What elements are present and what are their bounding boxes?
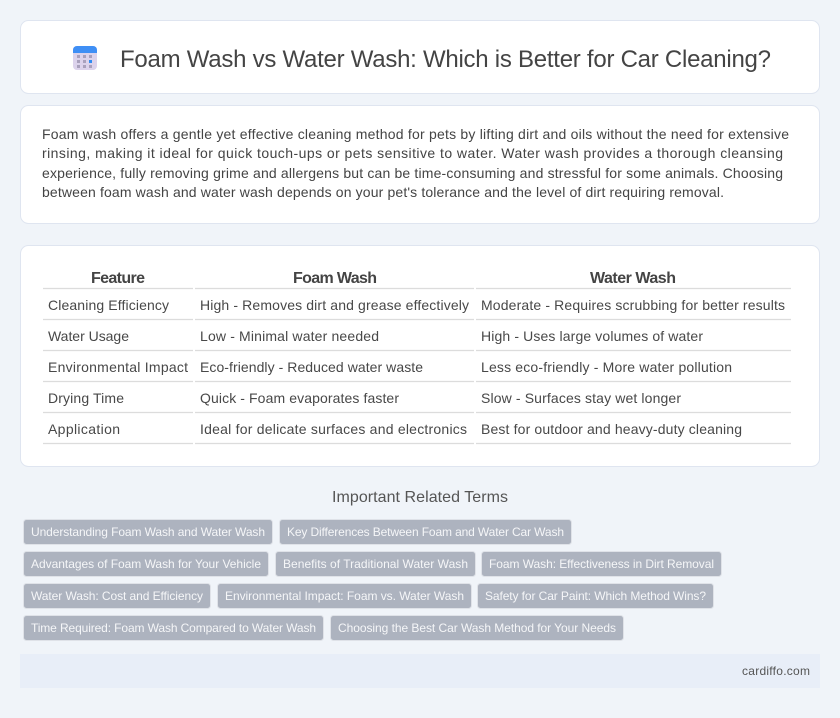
row: drying time: Quick - Foam evaporates faster [200,390,399,406]
table header row: Feature [91,270,145,287]
tag: Choosing the Best Car Wash Method for Your Needs [338,621,616,635]
intro paragraph [42,126,789,200]
row: drying time: Slow - Surfaces stay wet longer [481,390,681,406]
row: drying time [43,390,791,412]
row: application: Application [48,421,120,437]
row: water usage: Low - Minimal water needed [200,328,379,344]
footer bar [20,654,820,688]
row: cleaning efficiency: Moderate - Requires scrubbing for better results [481,297,785,313]
table header row: Foam Wash [293,270,377,287]
tag [218,584,472,608]
tag: Environmental Impact: Foam vs. Water Wash [225,589,464,603]
tag [276,552,476,576]
table header row [43,270,791,288]
tag: Water Wash: Cost and Efficiency [31,589,203,603]
tag [482,552,722,576]
title: Foam Wash vs Water Wash: Which is Better for Car Cleaning? [120,46,771,73]
row: cleaning efficiency: Cleaning Efficiency [48,297,169,313]
tag: Safety for Car Paint: Which Method Wins? [485,589,706,603]
row: application: Best for outdoor and heavy-duty cleaning [481,421,742,437]
row: cleaning efficiency: High - Removes dirt and grease effectively [200,297,469,313]
tag: Key Differences Between Foam and Water Car Wash [287,525,564,539]
tag [280,520,572,544]
row: water usage: High - Uses large volumes of water [481,328,703,344]
tag: Understanding Foam Wash and Water Wash [31,525,265,539]
footer site name: cardiffo.com [742,664,810,678]
tag: Benefits of Traditional Water Wash [283,557,468,571]
row: water usage [43,328,791,350]
tag: Advantages of Foam Wash for Your Vehicle [31,557,261,571]
tag [24,584,210,608]
tag: Foam Wash: Effectiveness in Dirt Removal [489,557,714,571]
row: environmental impact: Environmental Impact [48,359,188,375]
panel: header [20,20,820,94]
row: drying time: Drying Time [48,390,124,406]
heading: related terms: Important Related Terms [332,489,508,506]
row: application: Ideal for delicate surfaces and electronics [200,421,467,437]
row: application [43,421,791,444]
intro paragraph: rinsing, making it ideal for quick touch-ups or pets sensitive to water. Water wash provides a thorough cleansing [42,145,783,161]
intro paragraph: between foam wash and water wash depends on your pet's tolerance and the level of dirt requiring removal. [42,184,724,200]
tag [24,616,324,640]
panel: intro text [20,106,820,224]
icon: calendar [73,46,97,70]
panel: comparison table [20,246,820,466]
related terms tags [24,520,722,640]
tag [478,584,714,608]
row: water usage: Water Usage [48,328,129,344]
row: environmental impact: Less eco-friendly - More water pollution [481,359,732,375]
row: environmental impact: Eco-friendly - Reduced water waste [200,359,423,375]
tag: Time Required: Foam Wash Compared to Water Wash [31,621,316,635]
tag [24,520,272,544]
intro paragraph: experience, fully removing grime and allergens but can be time-consuming and stressful for some animals. Choosing [42,165,783,181]
table header row: Water Wash [590,270,676,287]
row: cleaning efficiency [43,297,791,320]
intro paragraph: Foam wash offers a gentle yet effective cleaning method for pets by lifting dirt and oils without the need for extensive [42,126,789,142]
tag [24,552,268,576]
row: environmental impact [43,359,791,382]
tag [330,616,624,640]
